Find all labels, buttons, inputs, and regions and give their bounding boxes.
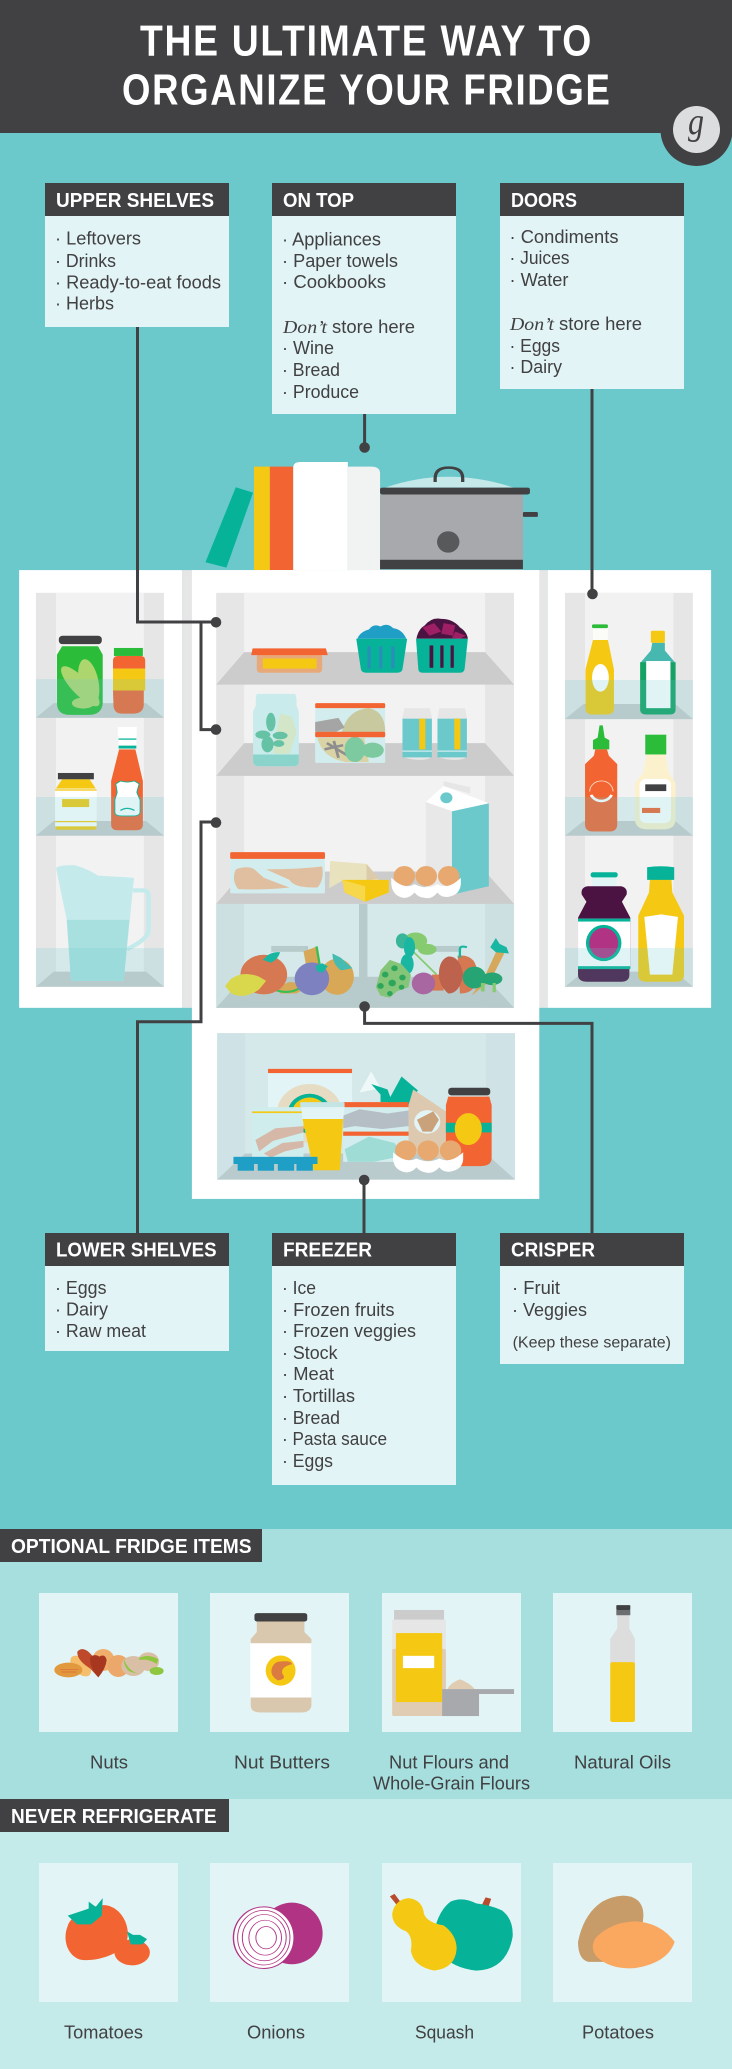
right door shelves: [565, 593, 693, 987]
panel: never refrigerate: [0, 1799, 732, 2069]
panel: upper shelves: · Ready-to-eat foods: [55, 272, 221, 292]
panel: on top: Don’t: [282, 317, 328, 337]
label: nuts: Nuts: [90, 1753, 128, 1773]
icon: pickle jar: [56, 636, 105, 715]
panel: freezer: · Eggs: [282, 1451, 333, 1471]
icon: blackberry basket: [416, 619, 468, 673]
label: onions: Onions: [247, 2023, 305, 2043]
icon: grape juice bottle: [578, 872, 630, 982]
icon: pasta sauce jar: [446, 1088, 492, 1166]
panel: upper shelves: [45, 183, 229, 327]
panel: on top: [272, 183, 456, 414]
crisper overlay: [216, 904, 514, 1008]
panel: upper shelves: · Leftovers: [55, 229, 141, 249]
icon: orange juice bottle: [638, 866, 684, 982]
panel: freezer: FREEZER: [283, 1239, 372, 1262]
panel: on-top items: [205, 462, 538, 570]
icon: herb jar: [253, 694, 299, 766]
panel: crisper: [500, 1233, 684, 1364]
icon: vegetable group: [376, 932, 509, 998]
fridge body: [19, 570, 711, 1199]
icon: eggs on shelf: [391, 866, 461, 898]
panel: crisper: · Veggies: [512, 1300, 587, 1320]
title banner: [0, 0, 732, 133]
panel: lower shelves: LOWER SHELVES: [56, 1239, 217, 1262]
icon: hot sauce bottle: [585, 725, 617, 831]
label: potatoes: Potatoes: [582, 2023, 654, 2043]
panel: lower shelves: · Raw meat: [55, 1321, 146, 1341]
panel: doors: · Condiments: [510, 227, 618, 247]
panel: crisper: · Fruit: [512, 1278, 560, 1298]
heading: never refrigerate: NEVER REFRIGERATE: [11, 1805, 217, 1828]
panel: doors: store here: [559, 314, 642, 334]
panel: freezer: · Tortillas: [282, 1386, 355, 1406]
left door shelves: [36, 593, 164, 987]
icon: oil bottle: [610, 1605, 635, 1722]
title banner: THE ULTIMATE WAY TO: [140, 16, 593, 65]
icon: water pitcher: [56, 865, 148, 981]
icon: mayo bottle: [635, 735, 676, 829]
panel: doors: [500, 183, 684, 389]
panel: upper shelves: · Herbs: [55, 294, 114, 314]
panel: doors: Don’t: [509, 314, 555, 334]
panel: on top: · Wine: [282, 338, 334, 358]
panel: doors: · Juices: [510, 248, 570, 268]
icon: blueberry basket: [356, 625, 407, 673]
logo badge: g: [688, 101, 704, 143]
icon: nut butter jar: [250, 1613, 311, 1713]
panel: lower shelves: [45, 1233, 229, 1351]
panel: upper shelves: · Drinks: [55, 251, 116, 271]
icon: nuts: [54, 1649, 164, 1680]
panel: doors: · Dairy: [510, 357, 562, 377]
icon: onions: [233, 1903, 323, 1968]
icon: stacked containers: [315, 703, 385, 763]
panel: optional fridge items: [0, 1529, 732, 1799]
label: nut flours: Whole-Grain Flours: [373, 1774, 530, 1794]
panel: freezer: · Pasta sauce: [282, 1429, 387, 1449]
logo badge: [660, 94, 732, 166]
panel: freezer: · Meat: [282, 1364, 334, 1384]
fridge illustration: [19, 570, 711, 1199]
label: natural oils: Natural Oils: [574, 1753, 671, 1773]
icon: leaning teal book: [205, 487, 253, 568]
heading: never refrigerate: [0, 1799, 229, 1832]
icon: frozen bread bag: [360, 1071, 446, 1160]
panel: upper shelves: UPPER SHELVES: [56, 189, 214, 212]
connector dots: [211, 442, 598, 1185]
panel: on top: ON TOP: [283, 189, 354, 212]
panel: freezer: [272, 1233, 456, 1485]
icon: cheese wedges: [329, 861, 389, 902]
icon: green bottle: [640, 631, 676, 714]
icon: eggs in freezer: [393, 1140, 463, 1173]
icon: drink cans: [402, 708, 467, 760]
panel: freezer: · Ice: [282, 1278, 316, 1298]
label: nut butters: Nut Butters: [234, 1753, 330, 1773]
freezer compartment: [217, 1033, 515, 1180]
icon: striped jar: [113, 648, 145, 714]
icon: raw meat container: [230, 852, 325, 893]
panel: freezer: · Frozen fruits: [282, 1300, 394, 1320]
label: tomatoes: Tomatoes: [64, 2023, 143, 2043]
panel: freezer: · Bread: [282, 1408, 340, 1428]
icon: frozen veggie container: [343, 1102, 409, 1162]
heading: optional fridge items: [0, 1529, 262, 1562]
icon: mustard jar: [55, 773, 97, 830]
panel: on top: · Cookbooks: [282, 272, 386, 292]
panel: doors: · Water: [510, 270, 568, 290]
icon: milk carton: [426, 781, 489, 893]
left door overlay bands: [36, 679, 164, 987]
panel: on top: · Paper towels: [282, 251, 398, 271]
icon: tomatoes: [66, 1898, 150, 1965]
icon: ketchup bottle: [111, 727, 143, 830]
title banner: ORGANIZE YOUR FRIDGE: [122, 66, 612, 115]
panel: on top: · Produce: [282, 382, 359, 402]
icon: stacked books: [254, 462, 380, 570]
panel: on top: · Appliances: [282, 229, 381, 249]
icon: flour bag and scoop: [392, 1610, 514, 1716]
connector lines: [138, 327, 592, 1233]
tiles: optional items: [39, 1593, 692, 1732]
tiles: never refrigerate items: [39, 1863, 692, 2002]
panel: lower shelves: · Dairy: [55, 1300, 108, 1320]
panel: doors: · Eggs: [510, 336, 560, 356]
icon: leftovers container: [251, 648, 328, 673]
panel: crisper: CRISPER: [511, 1239, 595, 1262]
panel: doors: DOORS: [511, 189, 577, 212]
panel: on top: store here: [332, 317, 415, 337]
label: squash: Squash: [415, 2023, 474, 2043]
right door overlay bands: [565, 680, 693, 987]
icon: tortilla bag: [268, 1069, 352, 1143]
main compartment: [216, 593, 514, 1008]
panel: lower shelves: · Eggs: [55, 1278, 106, 1298]
icon: ice tray: [233, 1157, 317, 1171]
icon: squash: [390, 1894, 513, 1971]
icon: fruit group: [225, 946, 354, 996]
icon: slow cooker: [380, 468, 538, 569]
panel: crisper: (Keep these separate): [513, 1335, 671, 1352]
heading: optional fridge items: OPTIONAL FRIDGE ITEMS: [11, 1535, 252, 1558]
panel: freezer: · Frozen veggies: [282, 1321, 416, 1341]
icon: bacon bag: [252, 1107, 303, 1160]
panel: freezer: · Stock: [282, 1343, 338, 1363]
label: nut flours: Nut Flours and: [389, 1753, 509, 1773]
panel: on top: · Bread: [282, 360, 340, 380]
label: nut flours: [373, 1753, 530, 1794]
icon: glass of juice: [300, 1102, 345, 1170]
icon: yellow bottle: [585, 624, 614, 714]
icon: potatoes: [578, 1896, 675, 1968]
